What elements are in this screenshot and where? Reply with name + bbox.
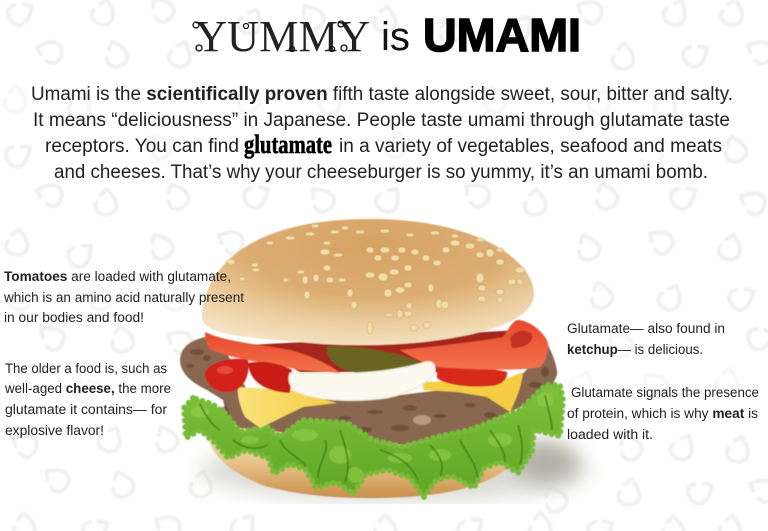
top bun [202, 219, 534, 345]
left tomato slice [205, 332, 340, 373]
tomato inner ring [510, 331, 532, 348]
title word: YUMMY: YUMMY [195, 12, 370, 61]
plate shadow [200, 438, 590, 502]
onion ring [289, 362, 435, 400]
callout: cheese: The older a food is, such as [5, 361, 167, 376]
patty texture [186, 349, 549, 433]
intro line 3: glutamate [244, 130, 332, 159]
highlight on patty [413, 415, 431, 425]
filling shadow behind bun [250, 330, 520, 372]
callout: meat: loaded with it. [567, 427, 653, 442]
intro line 3: in a variety of vegetables, seafood and meats [339, 136, 722, 157]
title word: is: is [381, 15, 410, 59]
callout: meat: of protein, which is why meat is [567, 406, 758, 421]
callout: ketchup: ketchup— is delicious. [567, 342, 703, 357]
callout: ketchup: Glutamate— also found in [567, 321, 725, 336]
sesame seeds [227, 224, 525, 334]
callout: tomatoes: which is an amino acid naturally present [3, 290, 244, 305]
intro paragraph [31, 84, 733, 183]
callout: ketchup [567, 321, 725, 357]
intro line 3: receptors. You can find [45, 136, 239, 157]
intro line 3 [45, 130, 722, 159]
callout: cheese [4, 361, 171, 438]
ketchup left [205, 359, 292, 393]
callout: tomatoes: in our bodies and food! [4, 310, 144, 325]
right tomato slice [400, 320, 548, 370]
title word: UMAMI: UMAMI [423, 9, 581, 61]
callout: cheese: explosive flavor! [5, 423, 104, 438]
intro line 4: and cheeses. That’s why your cheeseburger is so yummy, it’s an umami bomb. [54, 162, 708, 183]
callout: tomatoes: Tomatoes are loaded with glutamate, [4, 269, 231, 284]
ketchup right [437, 366, 507, 387]
callout: meat [567, 385, 759, 442]
callout: tomatoes [3, 269, 244, 325]
patty [180, 337, 557, 445]
lettuce [184, 385, 563, 497]
burger illustration [180, 219, 590, 502]
callout: meat: Glutamate signals the presence [571, 385, 759, 400]
intro line 2: It means “deliciousness” in Japanese. People taste umami through glutamate taste [33, 110, 730, 131]
title [193, 9, 581, 61]
bottom bun [206, 420, 528, 498]
cheese [238, 372, 523, 428]
pickle [327, 346, 420, 373]
callout: cheese: glutamate it contains— for [5, 402, 168, 417]
intro line 1: Umami is the scientifically proven fifth taste alongside sweet, sour, bitter and salty. [31, 84, 733, 105]
callout: cheese: well-aged cheese, the more [4, 381, 171, 396]
lettuce highlights and shading [191, 393, 553, 483]
